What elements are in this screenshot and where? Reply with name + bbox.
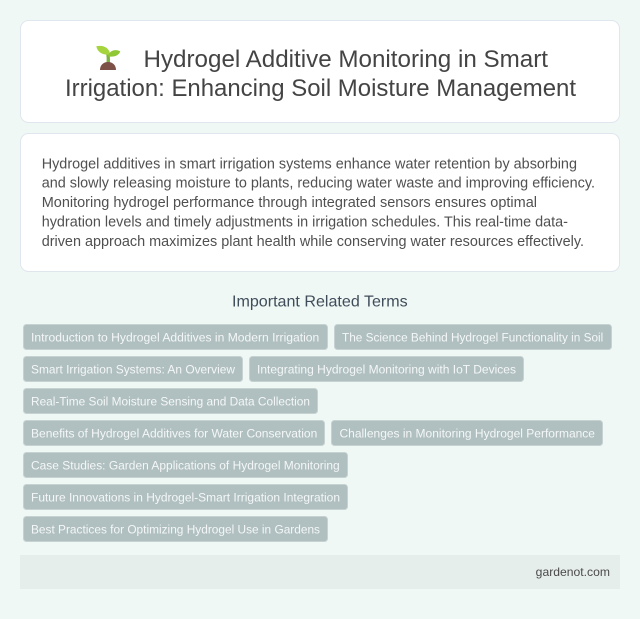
tag (24, 324, 328, 350)
tag: Introduction to Hydrogel Additives in Modern Irrigation (31, 330, 319, 344)
tag (334, 324, 612, 350)
text block: description: hydration levels and timely adjustments in irrigation schedules. This real-time data- (42, 214, 568, 230)
tag (24, 484, 348, 510)
tag: Benefits of Hydrogel Additives for Water Conservation (31, 426, 317, 440)
text block: description: Monitoring hydrogel performance through integrated sensors ensures optimal (42, 195, 537, 211)
tag: Challenges in Monitoring Hydrogel Performance (340, 426, 595, 440)
tag list (24, 324, 612, 542)
footer text: source: gardenot.com (536, 565, 610, 579)
tag: Best Practices for Optimizing Hydrogel Use in Gardens (31, 522, 320, 536)
tag: Integrating Hydrogel Monitoring with IoT Devices (257, 362, 516, 376)
icon: seedling (96, 46, 120, 70)
panel: description (20, 134, 620, 272)
tag: Case Studies: Garden Applications of Hydrogel Monitoring (31, 458, 340, 472)
tag: Future Innovations in Hydrogel-Smart Irrigation Integration (31, 490, 340, 504)
tag (24, 388, 318, 414)
title (65, 46, 576, 102)
text block: description: and slowly releasing moisture to plants, reducing water waste and improving efficiency. (42, 176, 595, 192)
tag (332, 420, 602, 446)
text block: description: driven approach maximizes plant health while conserving water resources effectively. (42, 234, 584, 250)
heading: related terms: Important Related Terms (232, 294, 408, 310)
tag: The Science Behind Hydrogel Functionality in Soil (342, 330, 603, 344)
title: Irrigation: Enhancing Soil Moisture Management (65, 75, 576, 102)
text block: description: Hydrogel additives in smart irrigation systems enhance water retention by absorbing (42, 156, 577, 172)
tag: Smart Irrigation Systems: An Overview (31, 362, 235, 376)
title: Hydrogel Additive Monitoring in Smart (144, 46, 548, 73)
tag (250, 356, 524, 382)
footer (20, 555, 620, 589)
tag (24, 452, 348, 478)
tag: Real-Time Soil Moisture Sensing and Data Collection (31, 394, 310, 408)
tag (24, 356, 242, 382)
text block: description (42, 156, 595, 250)
panel: title card (20, 20, 620, 122)
tag (24, 516, 328, 542)
tag (24, 420, 324, 446)
